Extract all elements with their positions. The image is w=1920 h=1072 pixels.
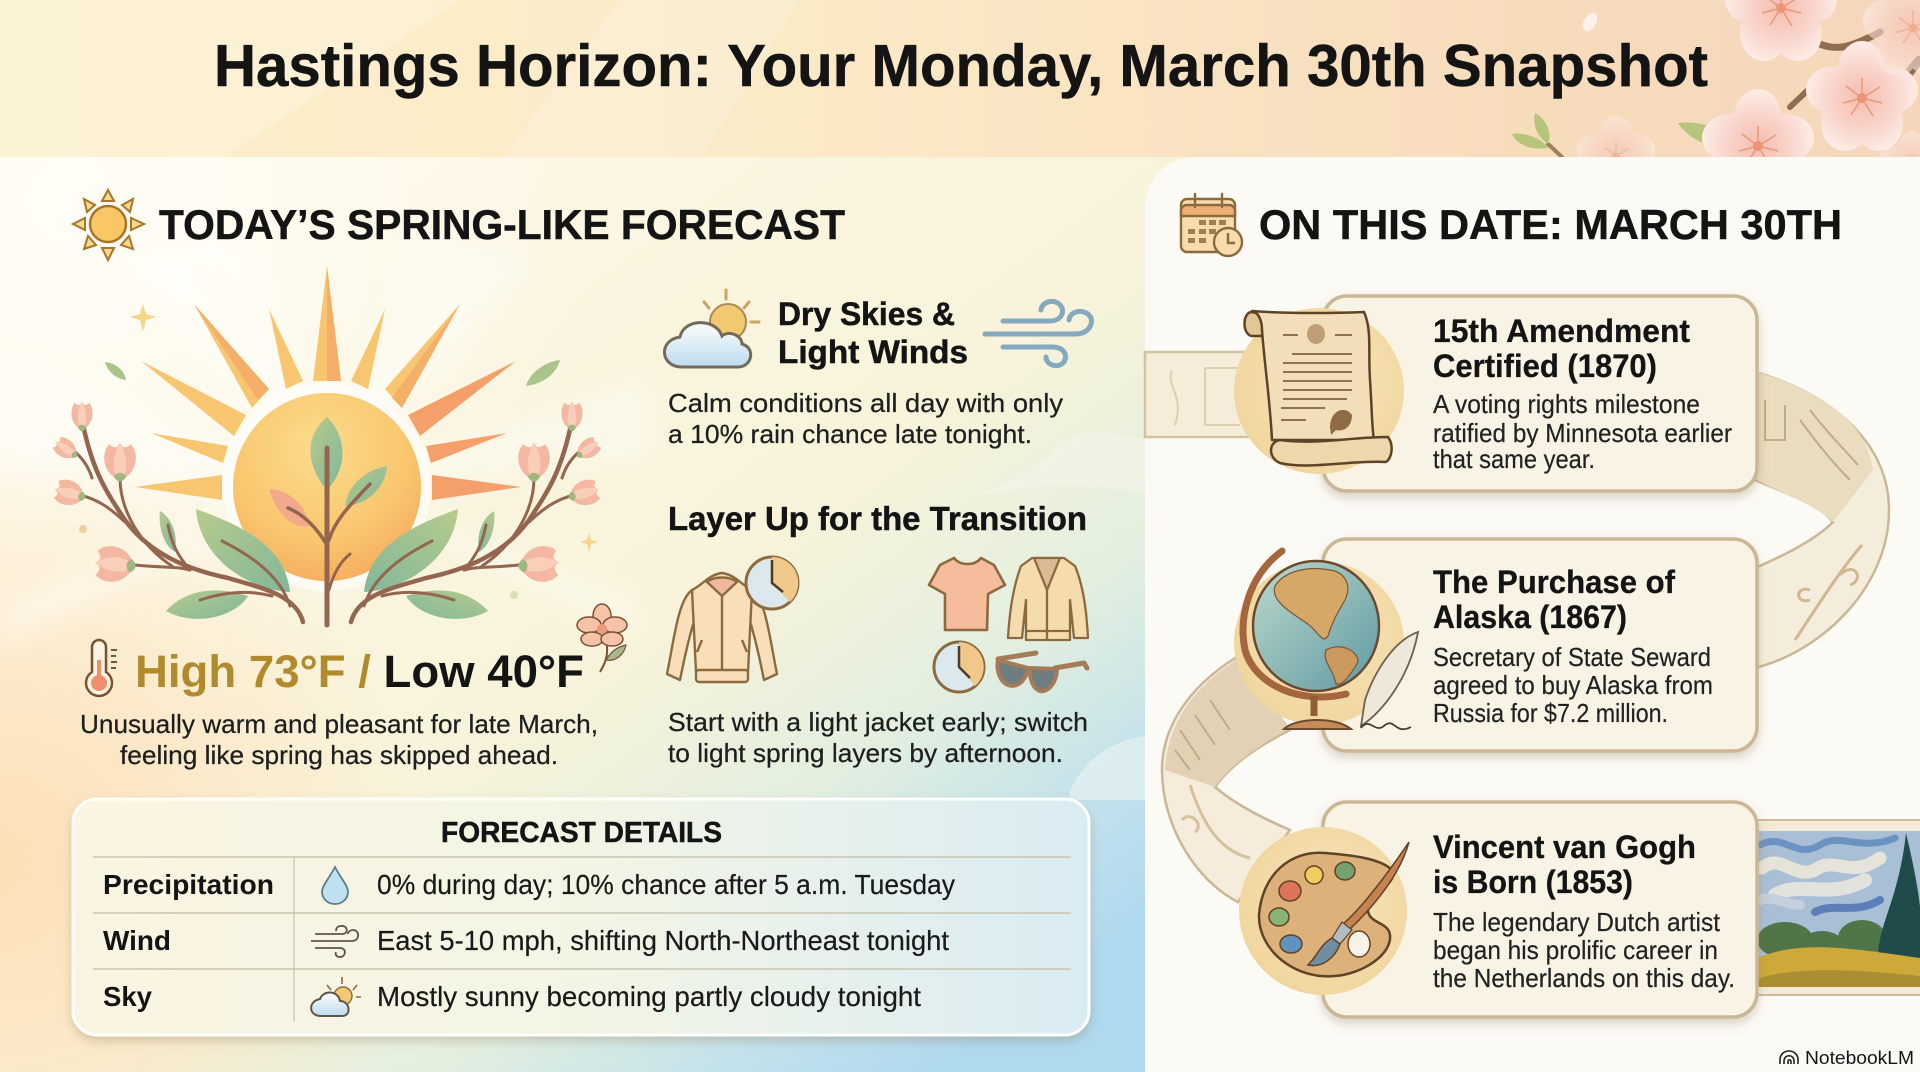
- title: Hastings Horizon: Your Monday, March 30th Snapshot: [214, 33, 1708, 99]
- panel: on this date: [1145, 157, 1920, 1072]
- section title: ON THIS DATE: MARCH 30TH: [1259, 201, 1842, 248]
- block: layer up: to light spring layers by afternoon.: [668, 738, 1063, 768]
- high and low temperature: High 73°F / Low 40°F: [135, 646, 584, 697]
- row: wind: East 5-10 mph, shifting North-Northeast tonight: [377, 925, 949, 956]
- text: temperature description: feeling like spring has skipped ahead.: [120, 740, 558, 770]
- description: Start with a light jacket early; switch: [668, 707, 1088, 737]
- card description: Secretary of State Seward: [1433, 642, 1711, 672]
- logo: notebooklm: NotebookLM: [1805, 1048, 1914, 1068]
- temperature: [86, 604, 627, 697]
- card: purchase of alaska: Alaska (1867): [1433, 599, 1627, 635]
- row: precipitation: 0% during day; 10% chance after 5 a.m. Tuesday: [377, 869, 955, 900]
- card: van gogh: began his prolific career in: [1433, 935, 1718, 965]
- heading: today's forecast: [73, 190, 845, 260]
- icon disc: [1234, 561, 1404, 725]
- card: 15th amendment: ratified by Minnesota earlier: [1433, 418, 1732, 448]
- card: purchase of alaska: agreed to buy Alaska from: [1433, 670, 1713, 700]
- card: 15th amendment: that same year.: [1433, 444, 1595, 474]
- icon: globe on stand: [1243, 551, 1379, 729]
- icon: clock two: [934, 642, 984, 692]
- card: purchase of alaska: [1234, 539, 1757, 751]
- subheading: Dry Skies &: [778, 296, 955, 332]
- row: sky: Sky: [103, 981, 152, 1012]
- central sprout: [269, 417, 387, 625]
- panel: today's forecast background: [0, 157, 1200, 1072]
- icon: sun behind cloud: [664, 290, 759, 367]
- icon disc: [1239, 827, 1407, 995]
- row: sky: [103, 977, 921, 1016]
- card: van gogh: the Netherlands on this day.: [1433, 963, 1735, 993]
- painting: wheat field with cypresses: [1750, 820, 1920, 995]
- card title: The Purchase of: [1433, 564, 1675, 600]
- card: 15th amendment: Certified (1870): [1433, 348, 1657, 384]
- card: purchase of alaska: Russia for $7.2 million.: [1433, 698, 1668, 728]
- row: wind: Wind: [103, 925, 171, 956]
- floating leaves and sparkles: [79, 304, 598, 599]
- block: dry skies and light winds: [664, 290, 1091, 449]
- card: 15th amendment: [1234, 296, 1757, 491]
- sun rays: [135, 266, 521, 500]
- text: temperature description: [80, 709, 598, 770]
- icon: scroll: [1244, 311, 1392, 466]
- header cherry blossoms: [1512, 0, 1920, 199]
- card title: Vincent van Gogh: [1433, 829, 1696, 865]
- section title: TODAY’S SPRING-LIKE FORECAST: [159, 201, 845, 248]
- icon disc: [1234, 308, 1404, 474]
- sun disc: [233, 393, 421, 581]
- icon: wind: [985, 301, 1091, 366]
- subheading: Layer Up for the Transition: [668, 500, 1087, 537]
- block: layer up: [667, 500, 1088, 768]
- icon: jacket: [667, 573, 777, 682]
- timeline ribbon: [1145, 352, 1889, 902]
- table heading: FORECAST DETAILS: [441, 817, 722, 849]
- icon: quill: [1361, 632, 1418, 729]
- icon: cardigan: [1008, 558, 1088, 640]
- row: precipitation: [103, 867, 955, 904]
- text: temperature description: Unusually warm and pleasant for late March,: [80, 709, 598, 739]
- description: Calm conditions all day with only: [668, 388, 1063, 418]
- header band: [0, 0, 1920, 160]
- icon: clock one: [746, 557, 798, 609]
- card: van gogh: [1239, 802, 1757, 1017]
- icon: sunglasses: [997, 653, 1087, 691]
- icon: palette and brush: [1259, 842, 1409, 976]
- card description: The legendary Dutch artist: [1433, 907, 1721, 937]
- icon: t-shirt: [929, 558, 1005, 630]
- block: dry skies and light winds: a 10% rain chance late tonight.: [668, 419, 1032, 449]
- panel: forecast details table: [73, 799, 1089, 1035]
- row: precipitation: Precipitation: [103, 869, 274, 900]
- illustration: sun and spring branches: [50, 266, 604, 625]
- block: dry skies and light winds: Light Winds: [778, 334, 968, 370]
- row: sky: Mostly sunny becoming partly cloudy tonight: [377, 981, 921, 1012]
- icon: sun: [73, 190, 144, 260]
- card description: A voting rights milestone: [1433, 389, 1700, 419]
- row: wind: [103, 925, 949, 957]
- icon: flower: [577, 604, 627, 672]
- icon: thermometer: [86, 640, 117, 696]
- card title: 15th Amendment: [1433, 313, 1690, 349]
- heading: on this date: [1181, 194, 1842, 256]
- card: van gogh: is Born (1853): [1433, 864, 1633, 900]
- left and right branches: [50, 401, 303, 622]
- icon: calendar with clock: [1181, 194, 1242, 256]
- sun halo: [223, 383, 431, 591]
